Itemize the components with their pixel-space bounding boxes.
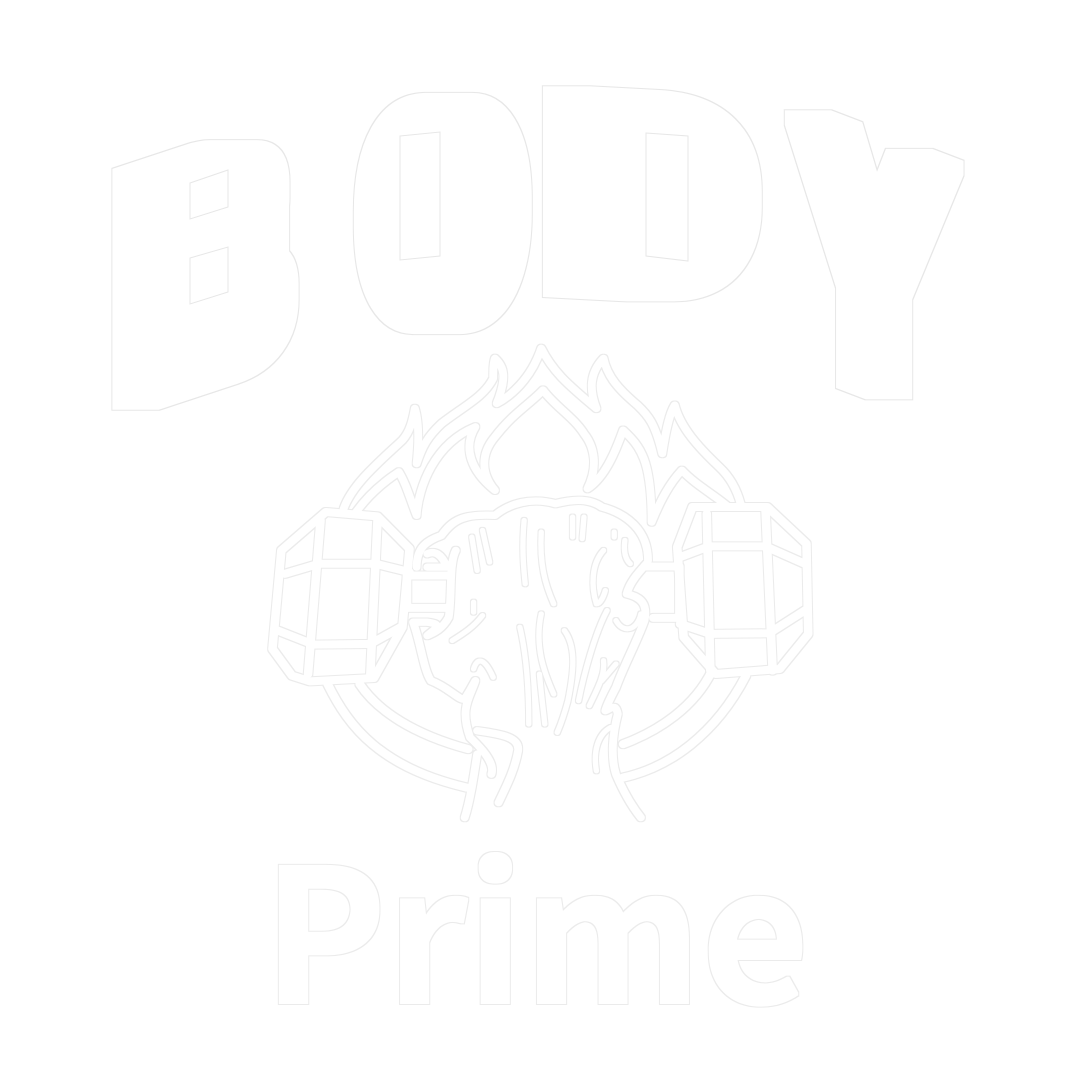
heading: BODY: D [547,31,751,361]
horns [328,671,746,788]
heading: BODY: B [120,56,286,479]
left dumbbell [272,512,447,681]
letter counters [190,132,688,304]
heading: BODY: O [369,26,517,399]
right dumbbell [644,507,808,674]
icon: flaming skull with dumbbells [272,348,808,818]
skull outline [413,500,648,818]
skull markings [452,517,641,771]
flames [344,348,741,522]
heading: BODY: Y [804,39,944,489]
heading: BODY [120,26,944,489]
wordmark: Prime: Prime [263,789,809,1057]
